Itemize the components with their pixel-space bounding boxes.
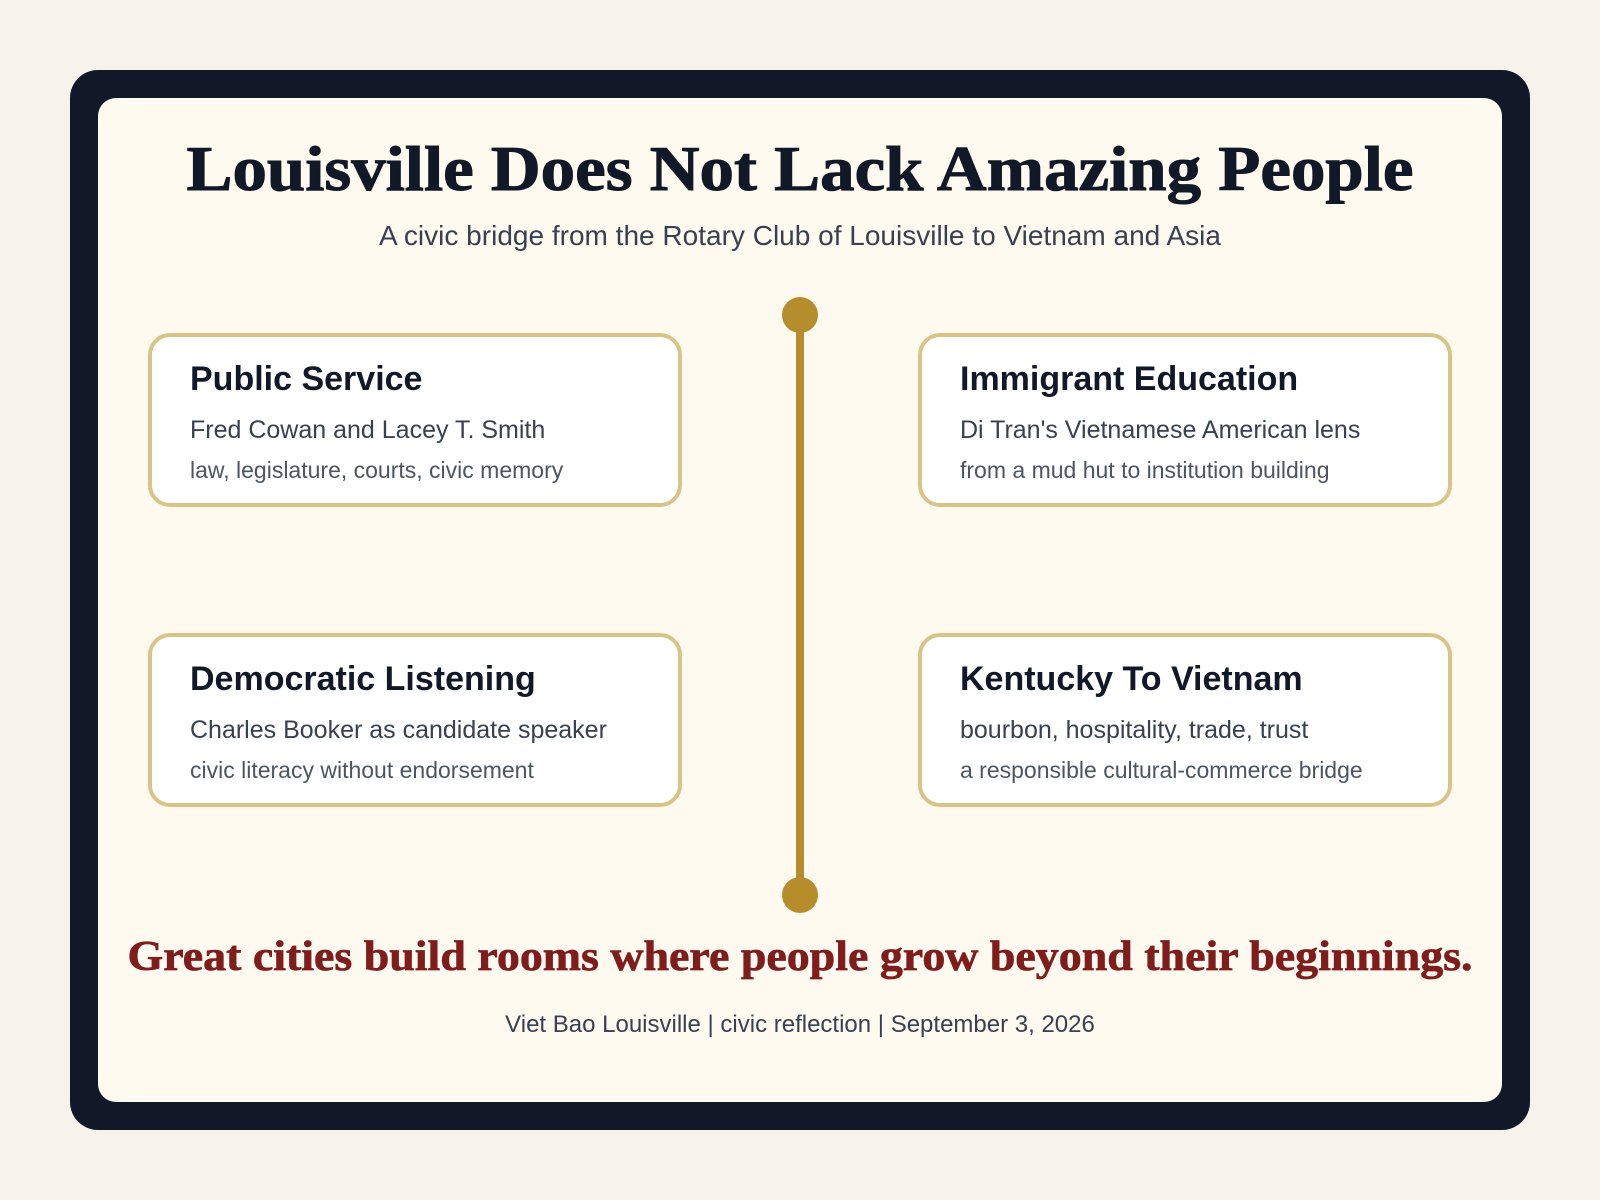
- panel: public service: law, legislature, courts, civic memory: [190, 457, 564, 483]
- panel: kentucky to vietnam: Kentucky To Vietnam: [960, 660, 1303, 698]
- panel: kentucky to vietnam: a responsible cultural-commerce bridge: [960, 757, 1363, 783]
- panel: democratic listening: [150, 635, 680, 805]
- subtitle: A civic bridge from the Rotary Club of Louisville to Vietnam and Asia: [379, 220, 1221, 251]
- footer credit: Viet Bao Louisville | civic reflection | September 3, 2026: [505, 1011, 1095, 1038]
- panel: democratic listening: Democratic Listening: [190, 660, 536, 698]
- panel: immigrant education: [920, 335, 1450, 505]
- cream inner panel: [98, 98, 1502, 1102]
- title: Louisville Does Not Lack Amazing People: [186, 134, 1413, 204]
- panel: kentucky to vietnam: bourbon, hospitality, trade, trust: [960, 716, 1308, 744]
- panel: public service: [150, 335, 680, 505]
- panel: public service: Public Service: [190, 360, 422, 398]
- panel: democratic listening: civic literacy without endorsement: [190, 757, 534, 783]
- panel: immigrant education: Immigrant Education: [960, 360, 1298, 398]
- closing statement: Great cities build rooms where people grow beyond their beginnings.: [128, 934, 1472, 980]
- panel: public service: Fred Cowan and Lacey T. Smith: [190, 416, 545, 444]
- panel: immigrant education: Di Tran's Vietnamese American lens: [960, 416, 1360, 444]
- panel: immigrant education: from a mud hut to institution building: [960, 457, 1329, 483]
- panel: kentucky to vietnam: [920, 635, 1450, 805]
- central bridge line with end dots: [782, 297, 818, 913]
- panel: democratic listening: Charles Booker as candidate speaker: [190, 716, 607, 744]
